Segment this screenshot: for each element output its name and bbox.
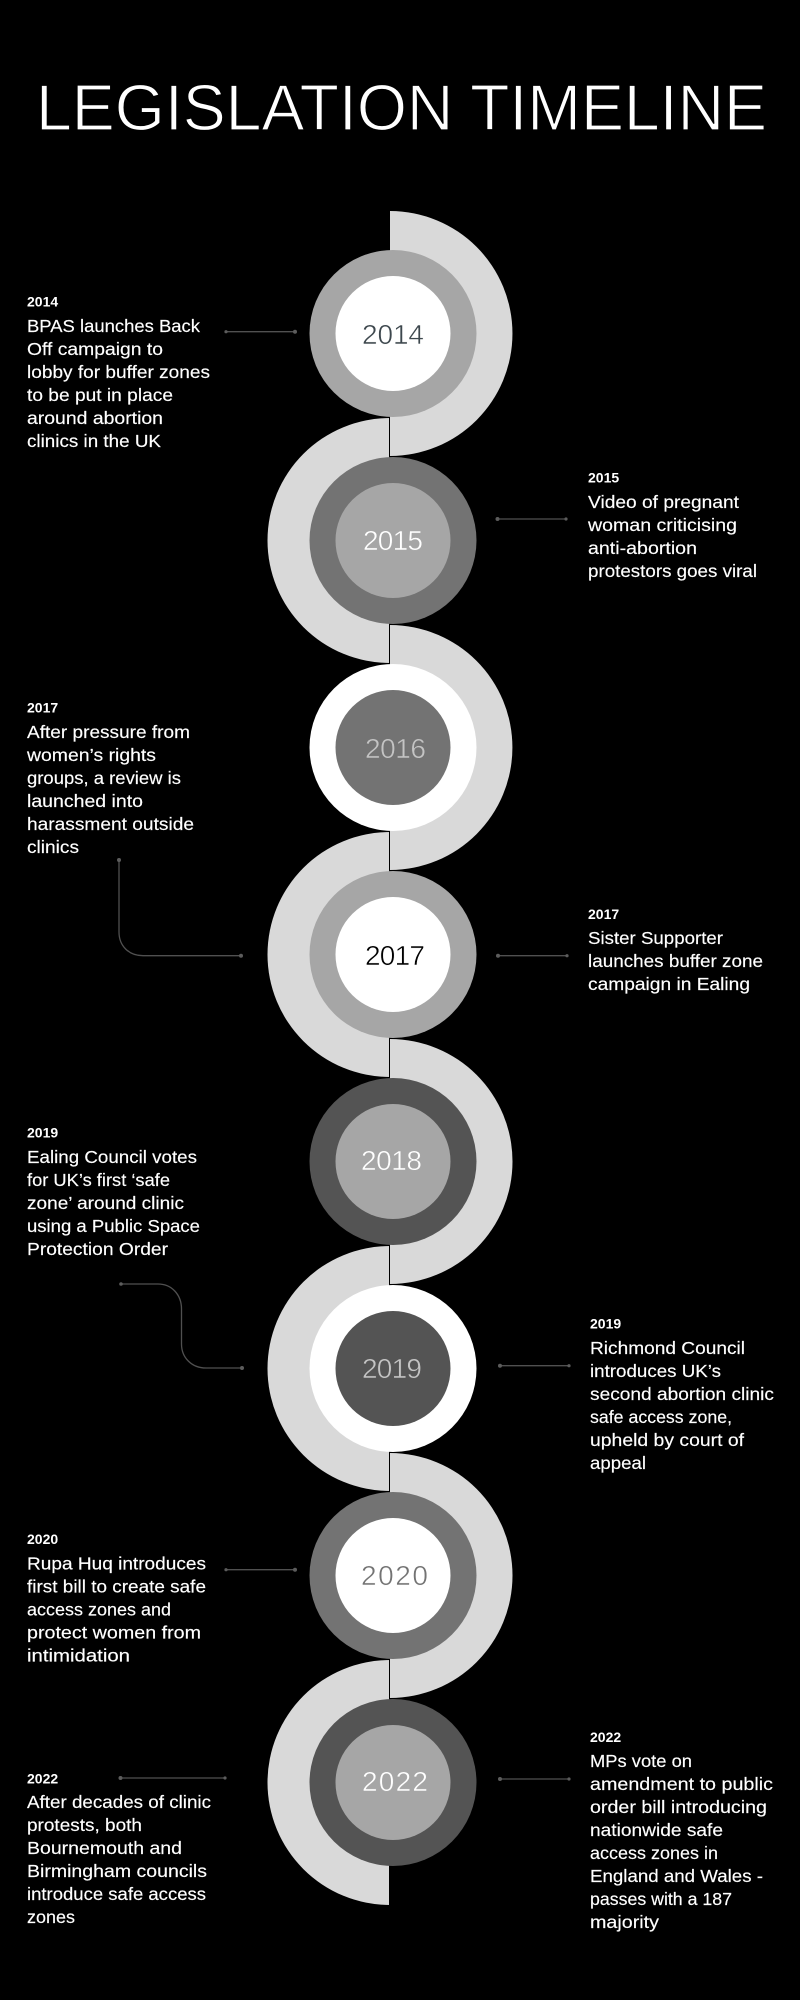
text block: 2022 MPs vote (590, 1729, 773, 1932)
text block: 2014 BPAS: Off campaign to (27, 339, 163, 359)
text block: 2022 MPs vote: majority (590, 1912, 659, 1932)
text block: 2015 video: Video of pregnant (588, 492, 739, 512)
year node 2014: 2014 (362, 319, 424, 350)
text block: 2020 Rupa Huq: protect women from (27, 1622, 201, 1642)
text block: 2017 review: harassment outside (27, 814, 194, 834)
year node 2015: 2015 (363, 525, 423, 556)
text block: 2017 Sister Supporter: launches buffer zone (588, 951, 763, 971)
connector 2015 (496, 517, 568, 521)
year node 2015 (310, 457, 476, 624)
year node 2019 (310, 1285, 476, 1452)
text block: 2019 Richmond Council: safe access zone, (590, 1407, 732, 1427)
year node 2018: 2018 (361, 1145, 422, 1176)
text block: 2014 BPAS: clinics in the UK (27, 431, 161, 451)
year node 2017: 2017 (365, 940, 425, 971)
text block: 2019 Richmond Council: Richmond Council (590, 1338, 745, 1358)
text block: 2020 Rupa Huq: Rupa Huq introduces (27, 1554, 206, 1574)
text block: 2019 Richmond Council: appeal (590, 1453, 646, 1473)
connector 2020 (224, 1568, 297, 1572)
text block: 2017 review: women’s rights (26, 745, 156, 765)
text block: 2020 Rupa Huq: first bill to create safe (27, 1576, 206, 1596)
year node 2016: 2016 (365, 733, 426, 764)
text block: 2019 Ealing Council: zone’ around clinic (27, 1193, 184, 1213)
text block: 2015 video (587, 470, 757, 581)
text block: 2019 Ealing Council: using a Public Space (27, 1216, 200, 1236)
text block: 2017 review: After pressure from (27, 722, 190, 742)
text block: 2020 Rupa Huq: 2020 (27, 1531, 58, 1547)
text block: 2017 review (26, 700, 194, 857)
connector 2022 left (118, 1776, 227, 1780)
text block: 2015 video: anti-abortion (588, 538, 697, 558)
text block: 2017 Sister Supporter: 2017 (588, 906, 619, 922)
year node 2020 (310, 1492, 476, 1659)
text block: 2022 MPs vote: order bill introducing (590, 1797, 767, 1817)
text block: 2014 BPAS: around abortion (27, 408, 163, 428)
year node 2016 (310, 664, 476, 831)
text block: 2019 Ealing Council (27, 1125, 200, 1259)
text block: 2019 Richmond Council: 2019 (590, 1316, 621, 1332)
text block: 2022 MPs vote: England and Wales - (590, 1866, 763, 1886)
text block: 2020 Rupa Huq: access zones and (27, 1600, 171, 1620)
text block: 2017 Sister Supporter (588, 906, 763, 994)
timeline spine: alternating half rings (268, 211, 512, 1905)
text block: 2017 Sister Supporter: Sister Supporter (588, 928, 723, 948)
text block: 2019 Ealing Council: 2019 (27, 1125, 58, 1141)
year node 2019: 2019 (362, 1353, 422, 1384)
year node 2018 (310, 1078, 476, 1245)
text block: 2017 review: launched into (27, 791, 143, 811)
year node 2014 (310, 250, 476, 417)
text block: 2019 Richmond Council: second abortion clinic (590, 1384, 774, 1404)
year node 2022 (310, 1699, 476, 1866)
connector 2019 right (498, 1364, 571, 1368)
text block: 2022 councils: After decades of clinic (27, 1792, 211, 1812)
year node 2022: 2022 (362, 1766, 428, 1797)
text block: 2015 video: woman criticising (587, 515, 737, 535)
connector 2017 left elbow (117, 858, 243, 958)
text block: 2017 review: 2017 (27, 700, 58, 716)
text block: 2022 MPs vote: passes with a 187 (590, 1889, 732, 1909)
text block: 2020 Rupa Huq: intimidation (27, 1646, 130, 1666)
text block: 2014 BPAS: 2014 (27, 294, 58, 310)
year node 2017 (310, 871, 476, 1038)
text block: 2022 councils: Bournemouth and (27, 1838, 182, 1858)
text block: 2019 Ealing Council: Protection Order (27, 1239, 168, 1259)
year node 2020: 2020 (361, 1560, 428, 1591)
text block: 2014 BPAS (27, 294, 210, 451)
text block: 2022 councils: zones (27, 1907, 75, 1927)
text block: 2022 MPs vote: nationwide safe (590, 1820, 723, 1840)
text block: 2020 Rupa Huq (27, 1531, 206, 1666)
text block: 2022 MPs vote: amendment to public (590, 1774, 773, 1794)
text block: 2019 Richmond Council: introduces UK’s (590, 1361, 721, 1381)
connector 2017 right (496, 954, 569, 958)
connector 2019 left elbow (119, 1282, 244, 1370)
text block: 2019 Ealing Council: Ealing Council votes (27, 1147, 197, 1167)
text block: 2019 Richmond Council: upheld by court of (590, 1430, 744, 1450)
text block: 2022 MPs vote: MPs vote on (590, 1751, 692, 1771)
text block: 2015 video: protestors goes viral (588, 561, 757, 581)
title: LEGISLATION TIMELINE (36, 71, 767, 144)
text block: 2022 MPs vote: 2022 (590, 1729, 621, 1745)
text block: 2017 review: clinics (27, 837, 79, 857)
text block: 2019 Ealing Council: for UK’s first ‘safe (27, 1170, 170, 1190)
text block: 2017 Sister Supporter: campaign in Ealing (588, 974, 750, 994)
text block: 2022 councils: protests, both (27, 1815, 142, 1835)
text block: 2014 BPAS: to be put in place (27, 385, 173, 405)
connector 2022 right (498, 1777, 571, 1781)
text block: 2022 councils (27, 1770, 211, 1927)
connector 2014 (224, 330, 297, 334)
text block: 2022 councils: 2022 (27, 1770, 58, 1786)
text block: 2017 review: groups, a review is (27, 768, 181, 788)
text block: 2022 councils: introduce safe access (27, 1884, 206, 1904)
text block: 2014 BPAS: BPAS launches Back (27, 316, 200, 336)
text block: 2022 MPs vote: access zones in (590, 1843, 718, 1863)
text block: 2019 Richmond Council (590, 1316, 774, 1473)
text block: 2022 councils: Birmingham councils (27, 1861, 207, 1881)
text block: 2015 video: 2015 (588, 470, 619, 486)
text block: 2014 BPAS: lobby for buffer zones (27, 362, 210, 382)
